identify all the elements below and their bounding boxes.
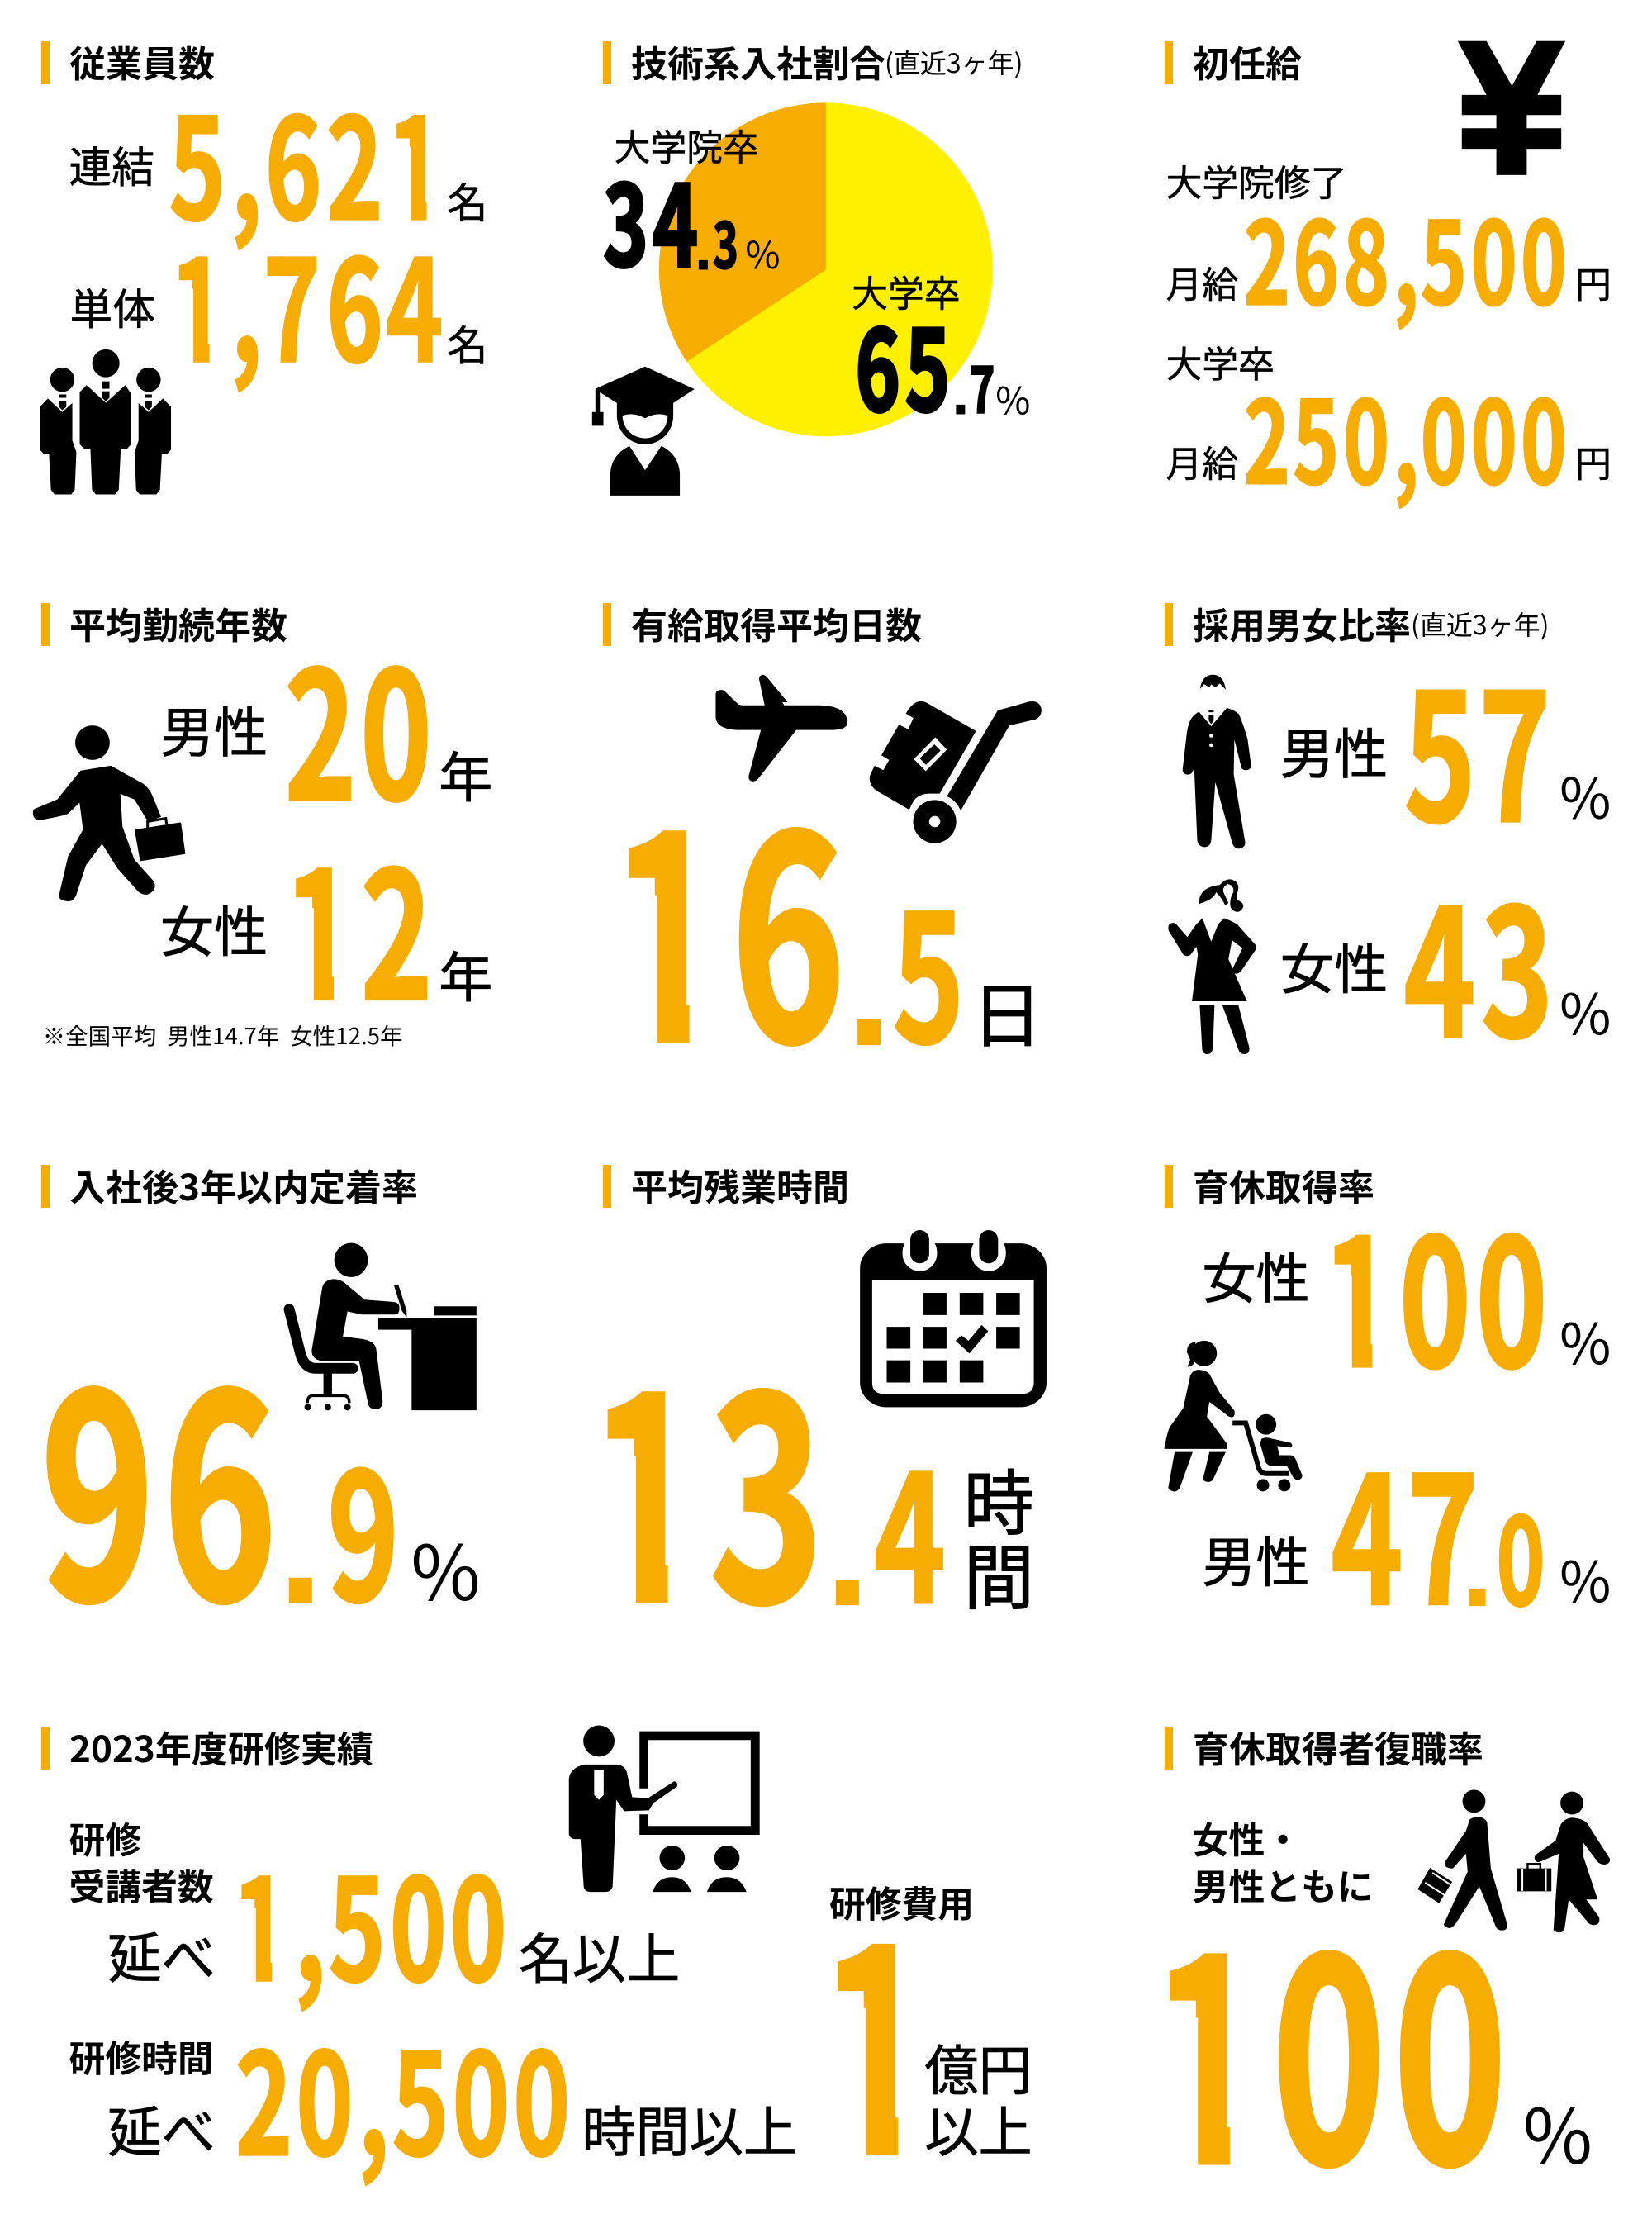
- unit: percent: %: [1559, 755, 1611, 835]
- icon: graduate: [592, 367, 695, 496]
- unit: years: 年: [439, 934, 492, 1012]
- icon: teacher and audience: [569, 1726, 760, 1892]
- number: paid leave days: 16: [610, 715, 845, 1123]
- label: women: 女性: [160, 889, 268, 967]
- panel: overtime: [588, 1158, 1047, 1682]
- number: university share: [855, 283, 1030, 444]
- icon: walking man with briefcase: [33, 725, 184, 901]
- unit: hours: [964, 1447, 1034, 1623]
- label: standalone: 単体: [70, 275, 155, 337]
- label: trainees: 研修: [69, 1811, 141, 1864]
- heading: hire gender ratio: [1165, 596, 1549, 649]
- number: graduate school share: %: [745, 226, 781, 280]
- number: overtime hours: 13: [588, 1276, 824, 1682]
- panel: hire gender ratio: [1165, 596, 1611, 1087]
- panel: starting salary: [1165, 35, 1612, 517]
- number: retention rate: 9: [327, 1396, 399, 1651]
- label: trainees: 受講者数: [69, 1858, 214, 1911]
- heading: paid leave: 有給取得平均日数: [631, 596, 922, 649]
- label: monthly: 月給: [1166, 435, 1238, 487]
- unit: people or more: 名以上: [519, 1915, 680, 1993]
- unit: percent: %: [411, 1513, 481, 1622]
- heading: technical hires: 技術系入社割合: [631, 35, 885, 88]
- pie chart: [659, 102, 993, 436]
- panel: average tenure: [33, 595, 492, 1051]
- number: men ratio: 57: [1404, 616, 1550, 872]
- unit: hours: 間: [964, 1521, 1034, 1623]
- heading: hire gender ratio: 採用男女比率: [1193, 596, 1411, 649]
- icon: woman standing: [1168, 879, 1256, 1054]
- number: overtime hours: [588, 1276, 946, 1682]
- number: university share: .: [952, 357, 970, 428]
- icon: person at desk: [289, 1243, 477, 1410]
- unit: yen: 円: [1575, 435, 1612, 487]
- label: women and men: [1193, 1811, 1374, 1911]
- heading: childcare leave: 育休取得率: [1193, 1158, 1374, 1211]
- unit: hours: 時: [964, 1447, 1034, 1550]
- unit: hours or more: 時間以上: [582, 2088, 797, 2167]
- label: trainees: [69, 1811, 214, 1911]
- number: retention rate: .: [278, 1448, 323, 1641]
- unit: days: 日: [971, 959, 1042, 1062]
- number: women leave rate: 100: [1322, 1162, 1548, 1418]
- number: retention rate: 96: [40, 1275, 277, 1681]
- label: training cost: 研修費用: [829, 1875, 974, 1928]
- icon: man standing: [1183, 675, 1251, 848]
- icon: commuting couple: [1417, 1789, 1610, 1932]
- number: university share: %: [995, 371, 1030, 425]
- heading: average tenure: 平均勤続年数: [69, 596, 287, 649]
- panel: training results: [41, 1720, 1032, 2214]
- heading: hire gender ratio: (直近3ヶ年): [1411, 605, 1549, 643]
- unit: hundred million yen or more: 以上: [924, 2088, 1032, 2167]
- heading: starting salary: 初任給: [1193, 35, 1302, 88]
- unit: percent: %: [1559, 1538, 1611, 1618]
- label: women: 女性: [1280, 925, 1388, 1004]
- heading: return rate: 育休取得者復職率: [1193, 1720, 1483, 1773]
- icon: airplane: [715, 675, 847, 782]
- number: women tenure: 12: [284, 795, 433, 1050]
- panel: employees: [40, 35, 487, 495]
- label: total: 延べ: [107, 2088, 216, 2167]
- number: overtime hours: .: [824, 1450, 871, 1642]
- unit: people: 名: [447, 314, 487, 373]
- label: monthly: 月給: [1166, 255, 1238, 308]
- number: women ratio: 43: [1403, 832, 1553, 1087]
- panel: return rate: [1151, 1720, 1610, 2214]
- number: university salary: 250,000: [1244, 352, 1567, 517]
- label: university: 大学卒: [852, 264, 960, 317]
- heading: technical hires: (直近3ヶ年): [885, 43, 1023, 81]
- number: university share: 7: [970, 340, 995, 431]
- unit: hundred million yen or more: 億円: [924, 2027, 1032, 2106]
- heading: employees: 従業員数: [69, 35, 215, 88]
- heading: training results: 2023年度研修実績: [69, 1720, 373, 1773]
- number: retention rate: [40, 1275, 399, 1681]
- unit: percent: %: [1559, 1300, 1611, 1380]
- number: men leave rate: 0: [1496, 1466, 1545, 1641]
- number: graduate school share: 3: [713, 196, 738, 286]
- unit: percent: %: [1523, 2077, 1593, 2186]
- number: graduate salary: 268,500: [1244, 173, 1567, 338]
- label: men: 男性: [160, 689, 268, 767]
- unit: percent: %: [1559, 971, 1611, 1051]
- number: university share: 65: [855, 283, 950, 444]
- unit: hundred million yen or more: [924, 2027, 1032, 2167]
- number: consolidated employees: 5,621: [169, 58, 444, 259]
- label: training hours: 研修時間: [69, 2030, 214, 2083]
- label: graduate school: 大学院修了: [1166, 154, 1346, 207]
- label: university: 大学卒: [1166, 335, 1275, 388]
- number: paid leave days: [610, 715, 964, 1123]
- panel: childcare leave: [1164, 1158, 1611, 1655]
- icon: suitcase cart: [870, 701, 1042, 843]
- number: graduate school share: [603, 138, 781, 298]
- heading: retention rate: 入社後3年以内定着率: [69, 1158, 418, 1211]
- label: men: 男性: [1202, 1518, 1310, 1597]
- icon: calendar: [860, 1230, 1047, 1407]
- label: women and men: 女性・: [1193, 1811, 1301, 1864]
- icon: mother with stroller: [1164, 1341, 1302, 1492]
- label: women and men: 男性ともに: [1193, 1858, 1374, 1911]
- number: standalone employees: 1,764: [169, 200, 443, 403]
- label: total: 延べ: [107, 1914, 216, 1993]
- label: women: 女性: [1202, 1235, 1310, 1314]
- unit: yen: 円: [1575, 255, 1612, 308]
- number: training hours: 20,500: [235, 1993, 570, 2196]
- label: men: 男性: [1280, 710, 1388, 789]
- note: national average: ※全国平均 男性14.7年 女性12.5年: [43, 1018, 403, 1051]
- number: trainees: 1,500: [232, 1819, 506, 2022]
- icon: three business people: [40, 349, 171, 495]
- icon: yen sign: [1458, 41, 1565, 175]
- label: consolidated: 連結: [69, 133, 154, 195]
- panel: technical hires: [592, 35, 1030, 496]
- heading: overtime: 平均残業時間: [631, 1158, 849, 1211]
- unit: people: 名: [447, 172, 487, 230]
- number: men leave rate: .: [1461, 1500, 1493, 1632]
- number: graduate school share: 34: [603, 138, 698, 298]
- number: overtime hours: 4: [874, 1398, 946, 1654]
- heading: technical hires: [603, 35, 1023, 88]
- number: paid leave days: 5: [892, 838, 964, 1093]
- number: graduate school share: .: [695, 212, 712, 283]
- label: graduate school: 大学院卒: [615, 118, 759, 171]
- unit: years: 年: [439, 734, 492, 813]
- panel: retention rate: [40, 1158, 481, 1681]
- number: men tenure: 20: [284, 595, 432, 850]
- number: men leave rate: [1331, 1399, 1545, 1655]
- panel: paid leave: [603, 596, 1042, 1123]
- number: paid leave days: .: [847, 890, 892, 1082]
- number: men leave rate: 47: [1331, 1399, 1479, 1655]
